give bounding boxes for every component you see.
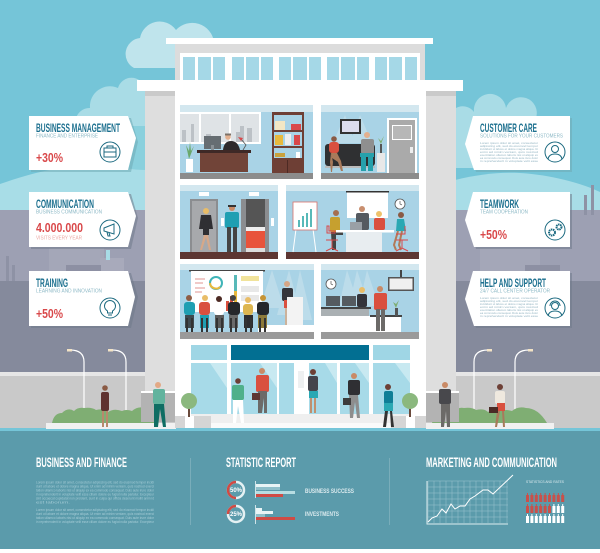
card: customer care <box>465 116 572 172</box>
icon: customer <box>545 142 565 162</box>
donut 25 percent: 25% <box>230 512 243 518</box>
lorem text: dunt ut labore et dolore magna aliqua. Ut enim ad minim veniam, quis nostrud exerci <box>36 512 154 516</box>
pavements <box>46 423 554 429</box>
card: business management <box>29 116 138 172</box>
man in mint shirt <box>232 378 244 423</box>
subtitle: FINANCE AND ENTERPRISE <box>36 134 99 140</box>
room: waiting area <box>321 105 419 179</box>
roof top <box>166 38 433 44</box>
room: reception <box>321 264 419 339</box>
body text <box>480 296 539 318</box>
bookcase <box>272 112 304 173</box>
body text: incididunt ut labore et dolore magna aliqua. Ut <box>480 147 538 151</box>
man with briefcase <box>343 373 360 418</box>
main body <box>145 91 456 392</box>
body text: ea commodo consequat. Duis aute irure dolor <box>480 156 538 160</box>
footer: statistic report <box>226 455 354 524</box>
manager <box>223 134 240 150</box>
title: COMMUNICATION <box>36 199 94 211</box>
tv <box>388 270 414 291</box>
value: +50% <box>480 227 507 242</box>
plant <box>186 142 194 172</box>
ground floor <box>191 345 410 428</box>
window band <box>180 53 420 81</box>
divider left <box>190 458 191 525</box>
body text <box>480 141 539 163</box>
receptionist <box>357 287 367 307</box>
title: BUSINESS MANAGEMENT <box>36 123 120 135</box>
woman in brown dress <box>101 385 109 427</box>
card: training <box>29 271 138 328</box>
lorem text: dunt ut labore et dolore magna aliqua. Ut enim ad minim veniam, quis nostrud exerci <box>36 484 154 488</box>
room: elevators <box>180 185 278 259</box>
upper floor <box>175 44 425 81</box>
lamp head <box>238 137 243 141</box>
monitor <box>204 136 221 152</box>
icon: briefcase <box>100 142 120 162</box>
body text: Lorem ipsum dolor sit amet, consectetur <box>480 141 538 145</box>
spotlights <box>333 115 372 143</box>
body text: adipiscing elit, sed do eiusmod tempor <box>480 144 538 148</box>
subtitle: TEAM COOPERATION <box>480 210 528 216</box>
steps <box>191 414 410 423</box>
clock <box>326 279 336 289</box>
office window <box>180 112 261 144</box>
ground <box>0 376 600 428</box>
stats label: STATISTICS AND RATES <box>526 480 565 484</box>
audience <box>184 295 269 332</box>
footer panel <box>0 431 600 549</box>
line chart <box>427 475 513 524</box>
glass reflections <box>210 363 410 388</box>
podium <box>287 297 303 325</box>
woman in black <box>199 208 213 250</box>
icon: bulb <box>100 298 120 318</box>
icon: megaphone <box>100 220 120 240</box>
bar chart 2 <box>255 505 295 524</box>
body text: exercitation ullamco laboris nisi ut aliquip ex <box>480 308 539 312</box>
title: TRAINING <box>36 278 68 290</box>
plant stand <box>377 136 385 172</box>
table <box>336 230 394 252</box>
building <box>137 38 463 428</box>
heading: BUSINESS AND FINANCE <box>36 455 127 470</box>
person grey <box>356 206 369 230</box>
body text: incididunt ut labore et dolore magna aliqua. Ut <box>480 302 538 306</box>
lorem text: Lorem ipsum dolor sit amet, consectetur adipiscing elit, sed do eiusmod tempor incidi <box>36 508 154 512</box>
lorem text: Lorem ipsum dolor sit amet, consectetur adipiscing elit, sed do eiusmod tempor incidi <box>36 480 154 484</box>
monitors <box>326 296 356 306</box>
body text: adipiscing elit, sed do eiusmod tempor <box>480 299 538 303</box>
counter <box>321 307 402 332</box>
subtitle: LEARNING AND INNOVATION <box>36 288 102 294</box>
laptop <box>350 222 362 230</box>
sky background <box>0 0 600 431</box>
lorem text: in reprehenderit in voluptate velit esse cillum dolore eu fugiat nulla pariatur. Excepteur <box>36 520 155 524</box>
woman in red skirt <box>489 384 505 427</box>
customer <box>374 286 387 331</box>
title: CUSTOMER CARE <box>480 123 537 135</box>
pictogram rows <box>526 493 564 523</box>
card: teamwork <box>465 192 572 249</box>
card: communication <box>29 192 138 249</box>
label: BUSINESS SUCCESS <box>305 489 354 495</box>
city foreground <box>0 281 600 372</box>
hill right <box>455 173 600 212</box>
man in teal <box>225 205 239 252</box>
lorem text: tation ullamco laboris nisi ut aliquip ex ea commodo consequat. Duis aute irure dolor <box>36 516 155 520</box>
spotlights <box>260 270 312 320</box>
room: presentation <box>180 264 314 339</box>
people outside <box>101 368 505 427</box>
vase <box>393 300 399 316</box>
value: +30% <box>36 150 63 165</box>
clock <box>395 199 405 209</box>
lamps <box>67 349 533 410</box>
side walls <box>141 391 459 428</box>
body text: in reprehenderit in voluptate velit esse <box>480 159 539 163</box>
person yellow <box>326 210 343 251</box>
person teal <box>394 212 408 251</box>
title: HELP AND SUPPORT <box>480 278 546 290</box>
screen <box>346 191 389 218</box>
cloud right <box>456 94 537 168</box>
body text: in reprehenderit in voluptate velit esse <box>480 314 539 318</box>
caption: VISITS EVERY YEAR <box>36 236 82 242</box>
body text: enim ad minim veniam, quis nostrud <box>480 150 539 154</box>
woman in teal jacket <box>383 384 394 427</box>
body text: Lorem ipsum dolor sit amet, consectetur <box>480 296 538 300</box>
bar chart 1 <box>255 481 295 498</box>
label: INVESTMENTS <box>305 512 339 518</box>
room: meeting <box>286 185 419 259</box>
man in green <box>153 382 166 427</box>
glass doors <box>191 363 410 414</box>
subtitle: BUSINESS COMMUNICATION <box>36 210 102 216</box>
sofa <box>325 144 375 168</box>
door <box>387 118 417 173</box>
icon: gears <box>545 220 565 240</box>
icon: headset operator <box>545 298 565 318</box>
lorem text: est laborum. <box>36 500 70 504</box>
footer: business and finance <box>36 455 155 524</box>
cloud left <box>75 78 145 158</box>
footer: marketing and communication <box>426 455 565 524</box>
heading: STATISTIC REPORT <box>226 455 296 470</box>
projection screen <box>189 270 265 312</box>
tree right <box>402 393 418 428</box>
card: help and support <box>465 271 572 328</box>
street band <box>0 372 600 377</box>
upper glass <box>191 345 410 360</box>
desk <box>197 150 251 172</box>
divider right <box>389 458 390 525</box>
elevator right <box>241 199 269 252</box>
elevator left <box>190 199 218 252</box>
subtitle: SOLUTIONS FOR YOUR CUSTOMERS <box>480 134 564 140</box>
floor indicators <box>199 192 274 226</box>
tree left <box>181 393 197 428</box>
man standing <box>360 132 374 171</box>
man in dark sweater <box>439 382 451 427</box>
man in red <box>252 368 269 413</box>
flip chart <box>293 202 317 252</box>
body text: enim ad minim veniam, quis nostrud <box>480 305 539 309</box>
lamp <box>241 139 246 150</box>
value: 4.000.000 <box>36 220 83 235</box>
hedges right <box>432 407 547 423</box>
body text: ea commodo consequat. Duis aute irure dolor <box>480 311 538 315</box>
person red <box>374 211 385 230</box>
woman in teal skirt <box>308 369 318 413</box>
hill left <box>0 166 146 212</box>
value: +50% <box>36 306 63 321</box>
hedges left <box>52 407 156 423</box>
subtitle: 24/7 CALL CENTER OPERATOR <box>480 288 550 294</box>
cloud behind roof <box>126 22 214 68</box>
lorem text: tation ullamco laboris nisi ut aliquip ex ea commodo consequat. Duis aute irure dolor <box>36 488 155 492</box>
main roof <box>137 80 463 91</box>
woman seated <box>329 136 343 172</box>
room: manager office <box>180 105 313 179</box>
city skyline <box>0 185 600 282</box>
picture <box>340 119 361 134</box>
lorem text: sint occaecat cupidatat non proident, sunt in culpa qui officia deserunt mollit anim id <box>36 496 154 500</box>
lorem text: in reprehenderit in voluptate velit esse cillum dolore eu fugiat nulla pariatur. Excepteur <box>36 492 155 496</box>
ceiling lamps <box>339 270 379 306</box>
lorem text <box>36 480 155 524</box>
title: TEAMWORK <box>480 199 519 211</box>
presenter <box>282 281 293 325</box>
door sign <box>298 371 304 388</box>
blue banner <box>231 345 369 360</box>
donut 50 percent: 50% <box>230 488 243 494</box>
band left <box>128 126 146 171</box>
body text: exercitation ullamco laboris nisi ut aliquip ex <box>480 153 539 157</box>
